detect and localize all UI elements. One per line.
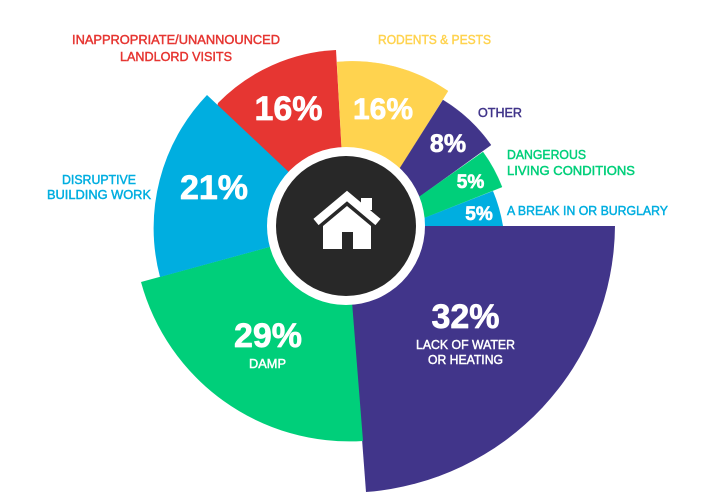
slice: dangerous living conditions (419, 152, 502, 218)
value: 16% red: 16% (254, 90, 323, 128)
slice: red landlord visits (215, 50, 346, 226)
label: lack of water or heating: OR HEATING (428, 353, 503, 367)
value: 16% yellow: 16% (353, 93, 413, 126)
slice: rodents and pests (337, 61, 448, 226)
center hub (267, 147, 425, 305)
value: 8%: 8% (430, 130, 466, 158)
label: disruptive building work: DISRUPTIVE (62, 173, 136, 187)
label: inappropriate landlord visits: INAPPROPRIATE/UNANNOUNCED (72, 33, 280, 47)
label: rodents and pests: RODENTS & PESTS (378, 33, 491, 47)
label: disruptive building work: BUILDING WORK (47, 188, 152, 202)
label: other: OTHER (478, 106, 522, 120)
label: disruptive building work (47, 173, 152, 202)
slice: other (400, 100, 491, 197)
label: a break in or burglary: A BREAK IN OR BURGLARY (507, 204, 669, 218)
value: 5% dangerous: 5% (457, 172, 484, 193)
icon: house (316, 196, 378, 249)
label: lack of water or heating: LACK OF WATER (416, 338, 515, 352)
slice: damp (141, 226, 363, 441)
slice: lack of water or heating (346, 226, 615, 492)
value: 21%: 21% (180, 169, 248, 207)
slice: a break in or burglary (424, 191, 503, 226)
label: inappropriate landlord visits: LANDLORD VISITS (120, 50, 232, 64)
label: lack of water or heating (416, 338, 515, 367)
label: inappropriate landlord visits (72, 33, 280, 64)
label: dangerous living conditions: DANGEROUS (507, 148, 586, 162)
value: 29%: 29% (234, 317, 302, 355)
value: 5% break in: 5% (465, 204, 493, 225)
label: damp: DAMP (249, 357, 286, 371)
label: dangerous living conditions: LIVING CONDITIONS (507, 164, 635, 178)
value: 32%: 32% (431, 298, 500, 336)
slice: disruptive building work (154, 95, 346, 277)
label: dangerous living conditions (507, 148, 635, 178)
